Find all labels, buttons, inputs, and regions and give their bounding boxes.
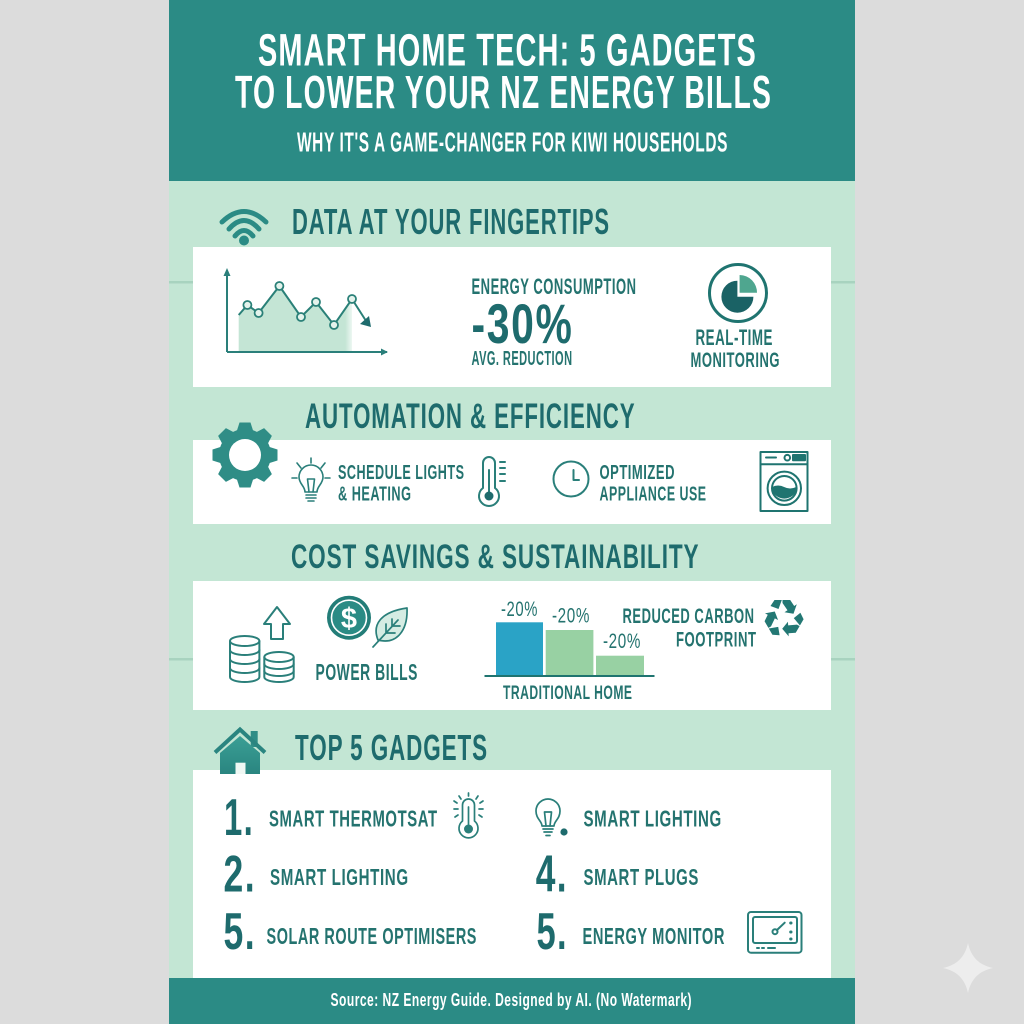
heading: automation and efficiency: AUTOMATION & EFFICIENCY xyxy=(305,397,636,436)
item: 4 smart plugs xyxy=(536,846,699,904)
panel: top 5 gadgets xyxy=(193,727,831,978)
icon: recycle xyxy=(761,600,806,639)
item: 5 solar route optimisers: 5. xyxy=(224,903,256,961)
label: real-time monitoring: REAL-TIME xyxy=(696,325,773,350)
line chart xyxy=(224,268,388,356)
bar chart: -20% xyxy=(603,630,641,653)
label: reduced carbon footprint: FOOTPRINT xyxy=(676,629,756,652)
bar chart xyxy=(484,598,654,704)
bar chart: -20% xyxy=(552,604,590,628)
panel: cost savings and sustainability xyxy=(193,538,831,710)
item: 4 smart plugs: SMART PLUGS xyxy=(584,864,699,890)
item: 5 energy monitor: ENERGY MONITOR xyxy=(582,923,725,949)
icon: light bulb xyxy=(292,458,330,501)
header banner xyxy=(169,0,855,181)
label: real-time monitoring xyxy=(690,325,780,372)
stat: energy consumption -30% xyxy=(472,274,636,370)
title: SMART HOME TECH: 5 GADGETS xyxy=(258,24,757,76)
icon: thermometer with rays xyxy=(454,793,483,838)
panel: automation and efficiency xyxy=(193,397,831,524)
item: 2 smart lighting: 2. xyxy=(224,846,256,904)
text: optimized appliance use: OPTIMIZED xyxy=(600,462,675,484)
icon: house xyxy=(215,730,265,774)
item: 1 smart thermostat: SMART THERMOTSAT xyxy=(269,806,438,832)
heading: data at your fingertips: DATA AT YOUR FINGERTIPS xyxy=(292,201,610,242)
item: 1 smart thermostat xyxy=(224,789,438,847)
item: 2 smart lighting xyxy=(224,846,409,904)
text: schedule lights and heating xyxy=(338,462,464,506)
icon: coin stacks with up arrow xyxy=(230,607,294,682)
text: optimized appliance use xyxy=(600,462,706,506)
item: smart lighting right: SMART LIGHTING xyxy=(584,806,722,832)
icon: washing machine xyxy=(760,452,808,511)
stat: energy consumption -30%: AVG. REDUCTION xyxy=(472,347,572,370)
bar chart: -20% xyxy=(501,598,538,621)
footer banner xyxy=(169,978,855,1024)
icon: clock xyxy=(554,462,588,496)
item: 5 energy monitor: 5. xyxy=(536,903,568,961)
label: reduced carbon footprint: REDUCED CARBON xyxy=(622,605,754,628)
icon: light bulb with list dot xyxy=(536,799,568,836)
icon: wifi xyxy=(222,212,266,246)
item: 4 smart plugs: 4. xyxy=(536,846,568,904)
icon: energy monitor display xyxy=(748,912,802,953)
label: reduced carbon footprint xyxy=(622,605,756,652)
icon: dollar coin xyxy=(327,596,371,640)
heading: cost savings and sustainability: COST SAVINGS & SUSTAINABILITY xyxy=(291,538,700,576)
item: 5 energy monitor xyxy=(536,903,725,961)
icon: leaf xyxy=(373,608,407,647)
icon: dollar coin: $ xyxy=(341,603,357,635)
source credit: Source: NZ Energy Guide. Designed by AI. (No Watermark) xyxy=(330,990,692,1010)
panel: data at your fingertips xyxy=(193,201,831,387)
text: schedule lights and heating: & HEATING xyxy=(338,484,412,506)
icon: sparkle xyxy=(943,943,993,993)
text: schedule lights and heating: SCHEDULE LIGHTS xyxy=(338,462,464,484)
stat: energy consumption -30%: ENERGY CONSUMPTION xyxy=(472,274,636,299)
item: 1 smart thermostat: 1. xyxy=(224,789,254,847)
icon: gear xyxy=(212,422,278,488)
item: 5 solar route optimisers: SOLAR ROUTE OPTIMISERS xyxy=(266,923,477,949)
text: optimized appliance use: APPLIANCE USE xyxy=(600,484,706,506)
heading: top 5 gadgets: TOP 5 GADGETS xyxy=(295,727,488,768)
label: power bills: POWER BILLS xyxy=(316,659,418,685)
item: 5 solar route optimisers xyxy=(224,903,477,961)
bar chart: TRADITIONAL HOME xyxy=(503,682,632,704)
icon: pie chart xyxy=(710,264,766,322)
label: real-time monitoring: MONITORING xyxy=(690,349,780,372)
title xyxy=(235,24,772,118)
icon: thermometer xyxy=(479,457,505,506)
item: 2 smart lighting: SMART LIGHTING xyxy=(270,864,409,890)
stat: energy consumption -30%: -30% xyxy=(472,292,574,355)
